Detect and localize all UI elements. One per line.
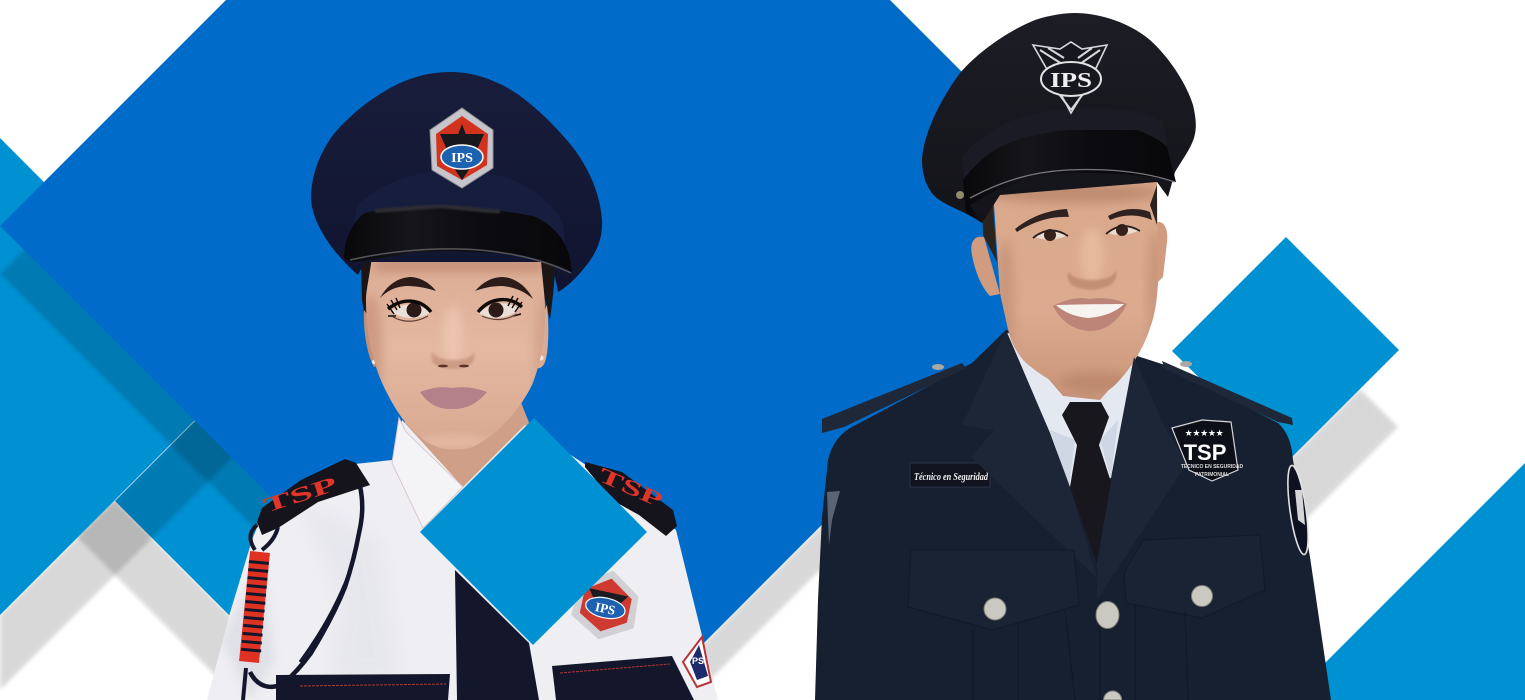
woman nose	[432, 352, 474, 369]
man eyes	[1033, 224, 1140, 241]
chest badge TSP: TSP	[1184, 440, 1226, 465]
man eyebrows	[1015, 209, 1152, 232]
shirt collar	[392, 418, 463, 528]
cap band	[350, 170, 565, 245]
chest badge TSP: TÉCNICO EN SEGURIDAD	[1181, 462, 1243, 470]
left epaulette TSP: TSP	[260, 471, 340, 518]
cap visor	[963, 130, 1176, 223]
chest badge TSP	[1172, 420, 1243, 481]
shoulder cord	[243, 486, 362, 700]
woman ears and earrings	[364, 305, 548, 368]
woman necktie	[455, 570, 539, 700]
cap badge IPS: IPS	[451, 151, 473, 166]
cap visor	[344, 207, 572, 272]
center light blue diamond	[420, 418, 647, 645]
lower left light blue diamond	[115, 316, 500, 700]
grey shadow under large diamond	[647, 347, 1043, 700]
man jacket	[815, 330, 1331, 700]
red cord wrap	[249, 552, 260, 662]
man smile	[1053, 298, 1127, 331]
man guard figure	[815, 13, 1331, 700]
upper arm patch: PS	[692, 656, 704, 666]
left ear	[971, 237, 1000, 296]
woman lips	[420, 387, 487, 409]
woman shirt	[207, 418, 718, 700]
left epaulette	[822, 363, 966, 433]
woman cap	[311, 72, 602, 292]
man cap	[922, 13, 1196, 223]
right epaulette TSP: TSP	[595, 463, 667, 512]
right ear	[1156, 222, 1167, 284]
name tag	[910, 463, 990, 487]
woman guard figure	[207, 72, 718, 700]
name tag: Técnico en Seguridad	[914, 471, 988, 483]
left sleeve badge	[827, 491, 840, 545]
left shirt pocket	[276, 674, 450, 700]
woman hair	[361, 262, 556, 325]
sleeve badge IPS	[567, 564, 645, 646]
woman face	[366, 250, 545, 450]
man nose	[1068, 270, 1116, 290]
cap badge IPS	[1033, 42, 1107, 113]
cap crown	[311, 72, 602, 292]
cap badge IPS: IPS	[1050, 68, 1092, 92]
cap badge IPS	[430, 108, 493, 188]
right sleeve badge	[1284, 464, 1312, 556]
man necktie	[1062, 402, 1111, 563]
man neck and face	[971, 180, 1167, 400]
man face shading	[990, 183, 1162, 392]
shadow of lower left diamond	[70, 493, 314, 700]
left lapel	[962, 330, 1097, 578]
right shirt pocket	[552, 656, 694, 700]
shadow of large blue diamond	[0, 214, 486, 700]
woman face shading	[366, 262, 545, 449]
left pocket flap	[908, 550, 1079, 630]
cap band	[962, 108, 1167, 180]
right epaulette TSP	[585, 462, 677, 536]
large blue diamond	[0, 0, 1118, 700]
man shirt collar shadow	[1050, 420, 1118, 487]
woman neck	[404, 400, 530, 489]
woman eyebrows	[380, 277, 533, 299]
far left light blue diamond	[0, 138, 238, 615]
right epaulette	[1162, 361, 1293, 425]
cap crown	[922, 13, 1196, 223]
right pocket flap	[1124, 535, 1265, 618]
right diamond shadow	[1262, 389, 1398, 525]
sleeve badge IPS: IPS	[594, 599, 617, 618]
bottom right blue triangle	[1288, 463, 1525, 700]
man shirt	[1006, 333, 1134, 487]
shadow of far left diamond	[0, 355, 335, 690]
chest badge TSP: ★★★★★	[1185, 428, 1224, 438]
left epaulette TSP	[257, 459, 370, 535]
man hair sides	[982, 185, 1157, 262]
right lapel	[1097, 357, 1187, 600]
face shape	[993, 180, 1158, 397]
pocket seams	[973, 600, 1188, 700]
background diamonds: left cluster	[0, 138, 500, 700]
right light blue diamond	[1172, 237, 1399, 463]
jacket buttons	[984, 586, 1212, 700]
woman eyes	[387, 296, 522, 321]
upper arm patch	[683, 637, 711, 687]
chest badge TSP: PATRIMONIAL	[1195, 472, 1229, 478]
